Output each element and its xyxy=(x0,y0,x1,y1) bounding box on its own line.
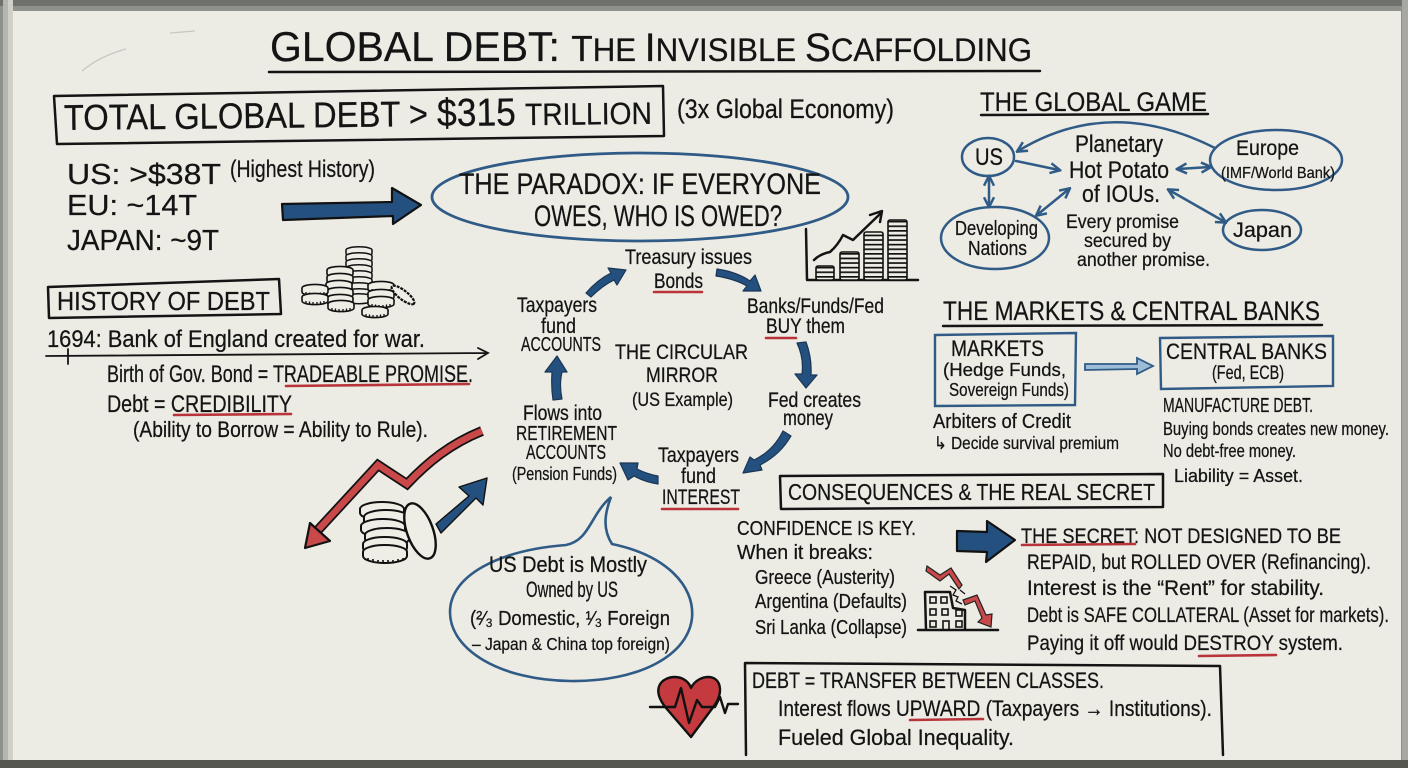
heading: markets and central banks: THE MARKETS & CENTRAL BANKS xyxy=(943,296,1320,326)
panel: markets: MARKETS xyxy=(951,336,1044,361)
debt by region: EU: ~14T xyxy=(67,190,197,222)
icon: collapsing building xyxy=(918,566,998,630)
text block: confidence: CONFIDENCE IS KEY. xyxy=(737,518,916,540)
diagram: global game: Developing xyxy=(955,218,1038,240)
heading: the global game: THE GLOBAL GAME xyxy=(980,87,1207,117)
icon: rising coin chart xyxy=(806,211,918,280)
diagram: global game: Every promise xyxy=(1066,212,1179,233)
label: treasury: Treasury issues xyxy=(625,246,752,269)
icon: coin stack xyxy=(360,499,442,563)
callout: US debt ownership: (²⁄₃ Domestic, ¹⁄₃ Foreign xyxy=(470,608,670,630)
panel: markets: ↳ Decide survival premium xyxy=(934,433,1119,453)
diagram: circular mirror: (Pension Funds) xyxy=(512,464,617,484)
callout: US debt ownership xyxy=(450,497,692,681)
text block: confidence: Sri Lanka (Collapse) xyxy=(755,617,907,639)
panel: markets xyxy=(933,333,1119,453)
diagram: circular mirror: ACCOUNTS xyxy=(526,442,606,464)
panel: central banks: MANUFACTURE DEBT. xyxy=(1163,395,1313,417)
panel: central banks: No debt-free money. xyxy=(1163,441,1296,461)
callout: the paradox xyxy=(432,153,848,241)
panel: markets: Sovereign Funds) xyxy=(949,379,1069,400)
diagram: circular mirror: BUY them xyxy=(766,315,845,338)
callout: US debt ownership: Owned by US xyxy=(526,577,618,602)
diagram: global game: Hot Potato xyxy=(1069,157,1169,184)
panel: debt transfer: Fueled Global Inequality. xyxy=(778,725,1014,750)
panel: history of debt: HISTORY OF DEBT xyxy=(57,286,270,316)
panel: central banks: (Fed, ECB) xyxy=(1212,363,1284,384)
label: centre: THE CIRCULAR xyxy=(615,340,748,364)
icon: blue rising arrow xyxy=(436,478,487,533)
debt by region: (Highest History) xyxy=(230,156,375,183)
diagram: circular mirror: MIRROR xyxy=(646,363,718,387)
text block: the secret: THE SECRET: NOT DESIGNED TO BE xyxy=(1021,524,1341,548)
icon: coin stacks xyxy=(302,247,417,318)
diagram: circular mirror: Bonds xyxy=(654,270,703,293)
diagram: global game xyxy=(941,122,1342,271)
icon: heart with pulse xyxy=(650,677,738,737)
diagram: circular mirror: INTEREST xyxy=(662,486,740,509)
panel: history of debt: Debt = CREDIBILITY xyxy=(107,391,292,418)
diagram: global game: of IOUs. xyxy=(1082,181,1160,208)
arrows xyxy=(586,268,626,297)
heading: consequences and the real secret: CONSEQUENCES & THE REAL SECRET xyxy=(788,479,1155,505)
icon: red falling line arrow xyxy=(305,431,482,548)
diagram: global game: Japan xyxy=(1233,219,1292,242)
panel: history of debt: 1694: Bank of England created for war. xyxy=(47,326,425,353)
panel: debt transfer: Interest flows UPWARD (Taxpayers → Institutions). xyxy=(778,696,1212,721)
text block: confidence xyxy=(737,518,916,639)
label: banks: Banks/Funds/Fed xyxy=(747,295,884,318)
text block: the secret: Interest is the “Rent” for stability. xyxy=(1027,576,1324,600)
text block: the secret: Paying it off would DESTROY system. xyxy=(1027,631,1343,655)
callout: the paradox: OWES, WHO IS OWED? xyxy=(534,200,782,233)
diagram: global game: Planetary xyxy=(1075,131,1163,158)
text block: the secret xyxy=(1021,524,1389,656)
panel: history of debt xyxy=(46,279,488,442)
panel: total global debt: TOTAL GLOBAL DEBT > $315 TRILLION xyxy=(64,90,652,139)
arrow: confidence to secret xyxy=(957,521,1015,562)
label: taxpayers accounts: Taxpayers xyxy=(517,294,597,317)
diagram: circular mirror: RETIREMENT xyxy=(516,423,617,445)
title: GLOBAL DEBT: THE INVISIBLE SCAFFOLDING xyxy=(270,23,1032,70)
panel: markets: (Hedge Funds, xyxy=(943,359,1066,380)
text block: confidence: Greece (Austerity) xyxy=(755,567,895,589)
diagram: global game: (IMF/World Bank) xyxy=(1221,165,1335,182)
callout: US debt ownership: US Debt is Mostly xyxy=(489,552,647,577)
label: fed: Fed creates xyxy=(768,389,861,412)
label: taxpayers interest: Taxpayers xyxy=(658,444,739,467)
arrow: regions to paradox xyxy=(282,188,421,224)
panel: history of debt: Birth of Gov. Bond = TRADEABLE PROMISE. xyxy=(107,361,473,388)
panel: total global debt xyxy=(54,86,894,144)
text block: confidence: When it breaks: xyxy=(737,542,873,564)
diagram: circular mirror: fund xyxy=(681,465,716,488)
callout: US debt ownership: – Japan & China top foreign) xyxy=(472,634,670,654)
debt by region xyxy=(67,156,375,257)
panel: debt transfer: DEBT = TRANSFER BETWEEN CLASSES. xyxy=(752,668,1104,693)
panel: central banks: Liability = Asset. xyxy=(1174,466,1303,486)
panel: central banks: CENTRAL BANKS xyxy=(1166,339,1327,364)
panel: central banks xyxy=(1160,336,1389,486)
callout: the paradox: THE PARADOX: IF EVERYONE xyxy=(459,168,821,201)
diagram: global game: US xyxy=(975,144,1003,171)
panel: history of debt: (Ability to Borrow = Ability to Rule). xyxy=(133,417,428,442)
diagram: global game: secured by xyxy=(1084,231,1171,252)
diagram: global game: Europe xyxy=(1236,137,1299,160)
heading: consequences and the real secret xyxy=(780,474,1163,509)
diagram: global game: another promise. xyxy=(1077,250,1210,271)
arrow: markets to central banks xyxy=(1085,358,1153,374)
diagram: circular mirror: ACCOUNTS xyxy=(521,334,601,356)
debt by region: US: >$38T xyxy=(67,159,221,191)
debt by region: JAPAN: ~9T xyxy=(67,225,219,257)
diagram: circular mirror xyxy=(512,246,884,509)
text block: confidence: Argentina (Defaults) xyxy=(755,591,907,613)
label: retirement: Flows into xyxy=(523,402,602,425)
diagram: circular mirror: money xyxy=(783,407,833,430)
diagram: circular mirror: fund xyxy=(541,315,576,338)
panel: markets: Arbiters of Credit xyxy=(933,411,1071,433)
panel: total global debt: (3x Global Economy) xyxy=(677,94,894,124)
diagram: circular mirror: (US Example) xyxy=(632,390,733,411)
diagram: global game: Nations xyxy=(968,238,1027,260)
panel: debt transfer xyxy=(745,663,1223,755)
